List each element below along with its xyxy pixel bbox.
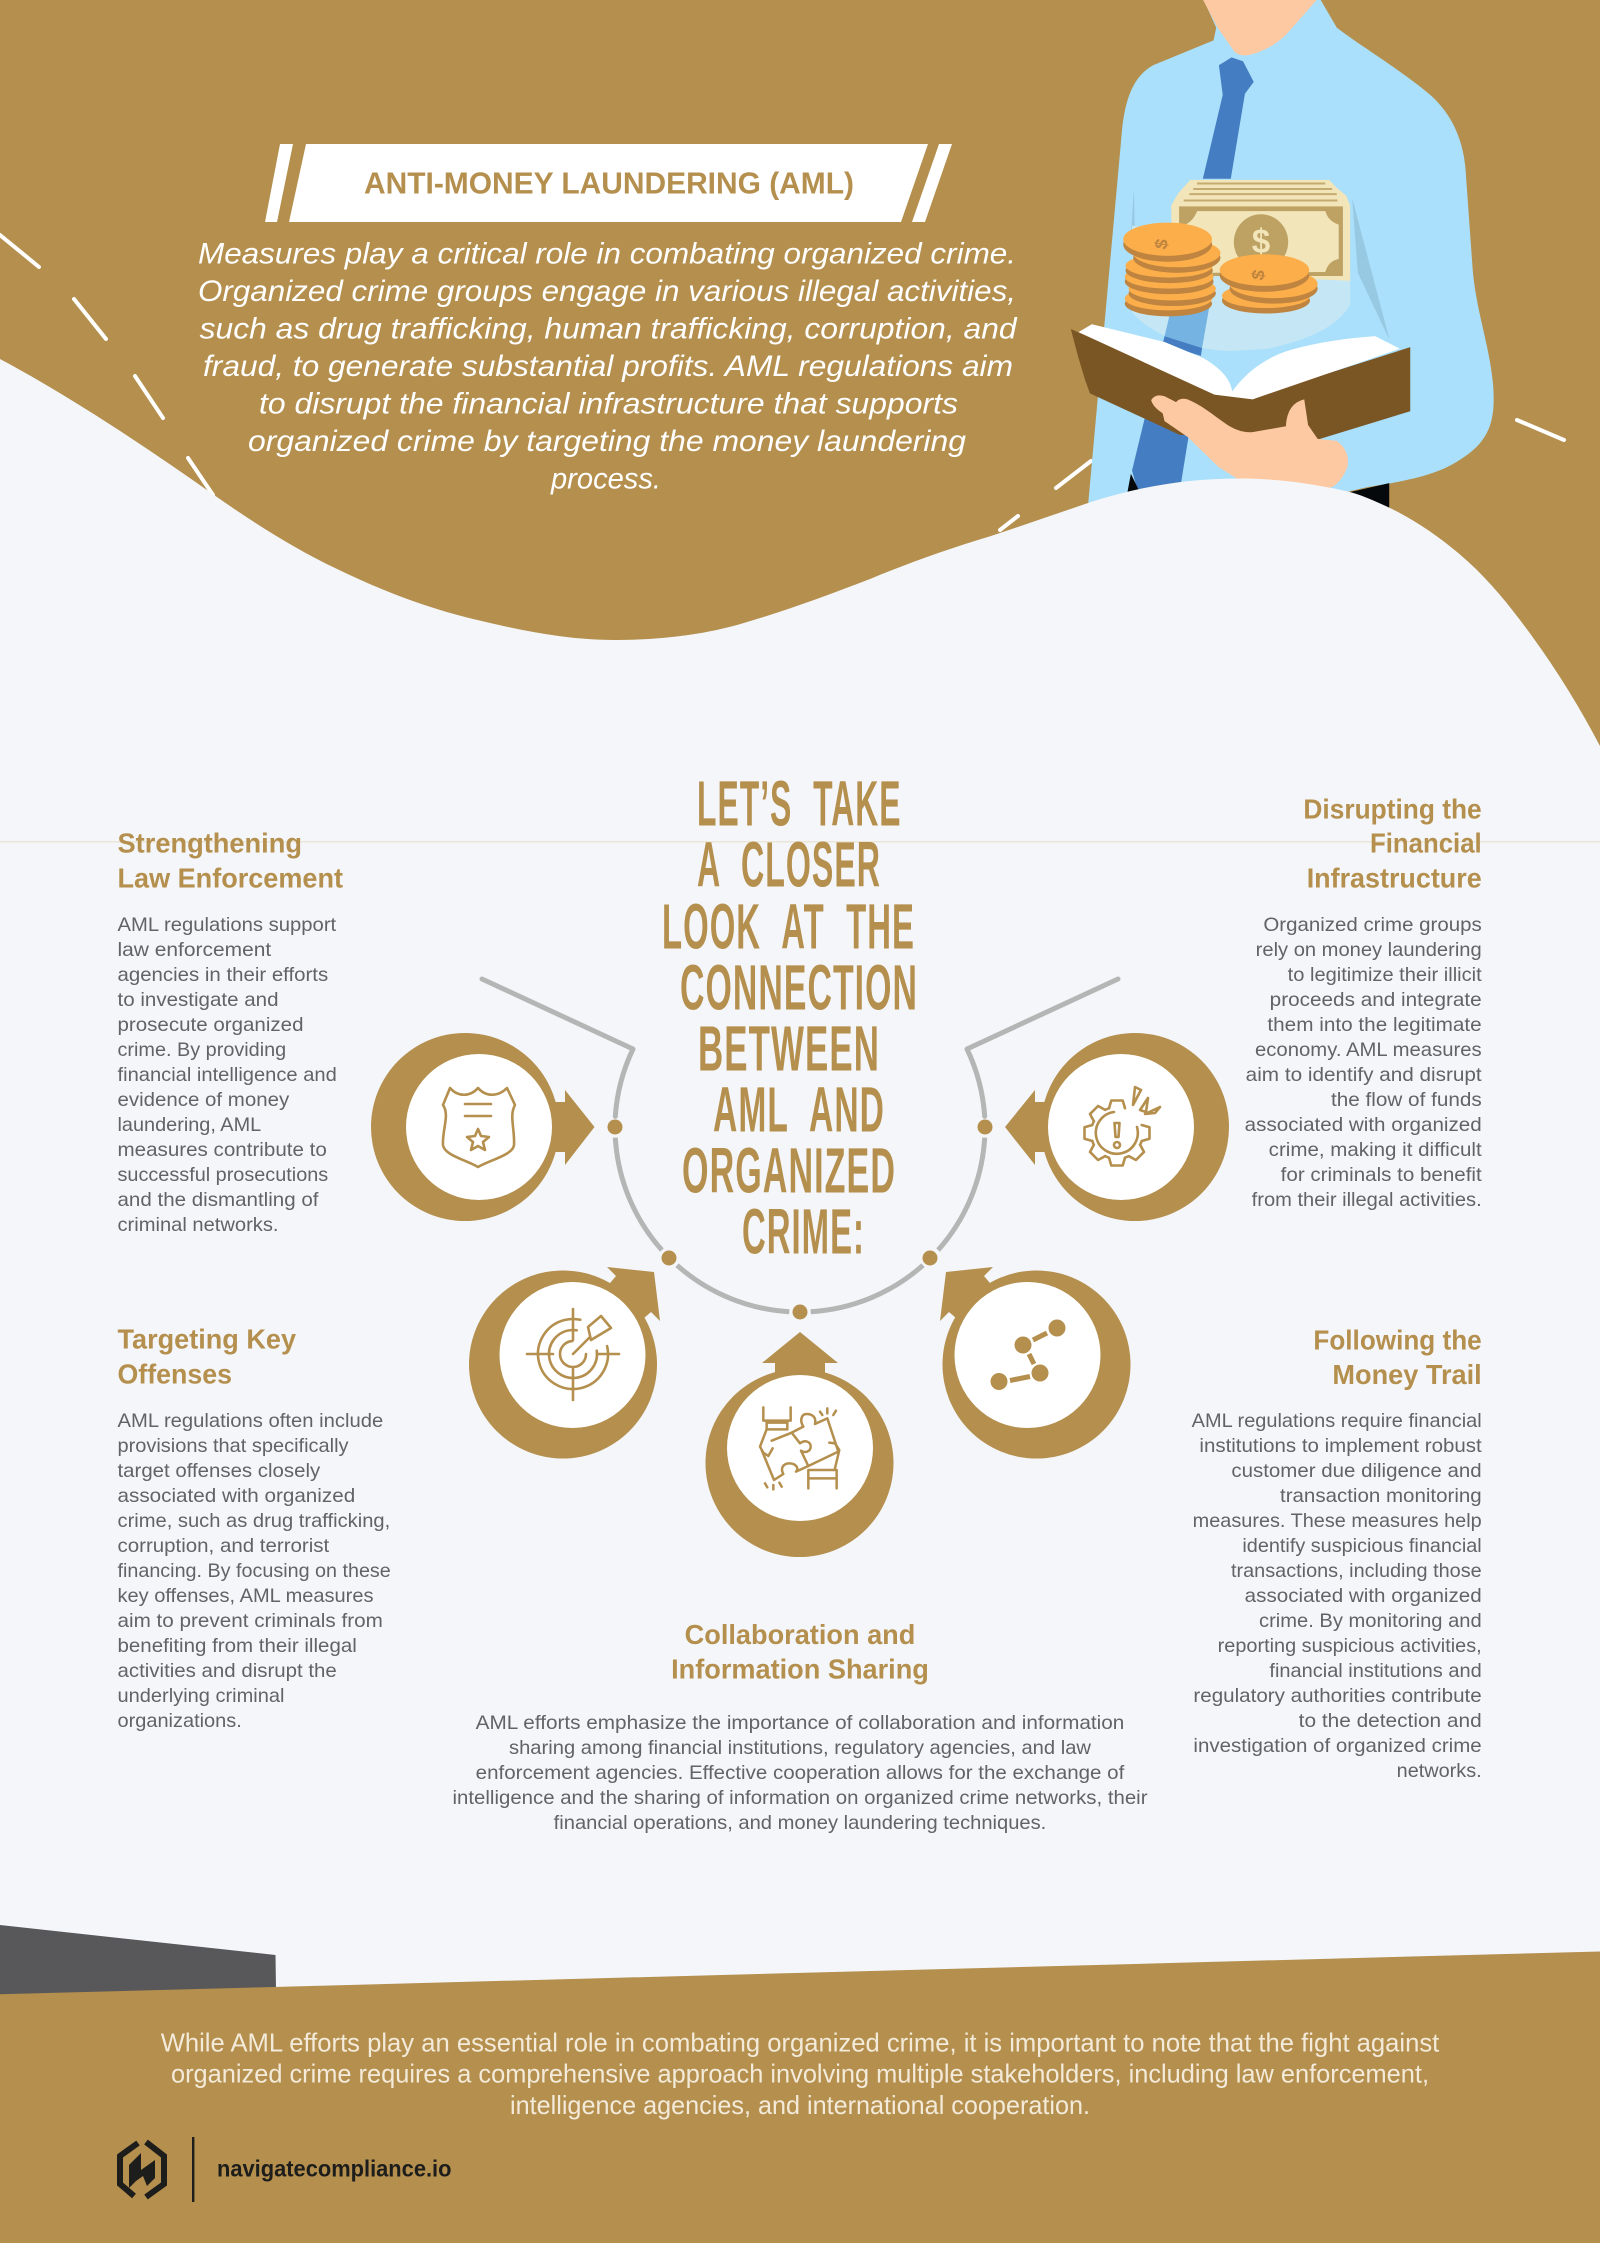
section: Following the Money Trail: to the detection and	[1299, 1710, 1482, 1732]
section: Following the Money Trail: Money Trail	[1332, 1359, 1482, 1390]
logo: navigatecompliance.io	[120, 2137, 452, 2202]
section: Targeting Key Offenses: AML regulations often include	[118, 1410, 383, 1432]
center headline: AML AND	[713, 1074, 885, 1146]
center headline: LET’S TAKE	[697, 768, 902, 840]
intro paragraph: process.	[550, 463, 661, 496]
section: Following the Money Trail: customer due diligence and	[1231, 1460, 1482, 1482]
section: Disrupting the Financial Infrastructure: Disrupting the	[1303, 793, 1482, 824]
section: Following the Money Trail: associated with organized	[1245, 1585, 1482, 1607]
section: Disrupting the Financial Infrastructure	[1245, 793, 1482, 1211]
section: Following the Money Trail: Following the	[1313, 1324, 1482, 1355]
section: Disrupting the Financial Infrastructure: from their illegal activities.	[1252, 1189, 1482, 1211]
white wave divider	[0, 359, 1600, 850]
footer text: intelligence agencies, and international cooperation.	[510, 2090, 1090, 2120]
intro paragraph: to disrupt the financial infrastructure that supports	[259, 388, 958, 420]
section: Following the Money Trail: transaction monitoring	[1280, 1485, 1482, 1507]
section: Disrupting the Financial Infrastructure: proceeds and integrate	[1270, 989, 1482, 1011]
section: Targeting Key Offenses: key offenses, AML measures	[118, 1585, 374, 1607]
section: Targeting Key Offenses: crime, such as drug trafficking,	[118, 1510, 390, 1532]
section: Following the Money Trail: regulatory authorities contribute	[1193, 1685, 1482, 1707]
icon circle: broken gear	[1005, 1033, 1229, 1221]
center headline	[662, 768, 918, 1268]
intro paragraph: fraud, to generate substantial profits. AML regulations aim	[203, 350, 1013, 383]
illustration: man holding a book with money: $	[1252, 224, 1271, 261]
icon circle: network dots	[940, 1267, 1130, 1458]
illustration: man holding a book with money: $	[1248, 268, 1269, 282]
section: Strengthening Law Enforcement: evidence of money	[118, 1089, 289, 1111]
section: Following the Money Trail: crime. By monitoring and	[1259, 1610, 1482, 1632]
section: Disrupting the Financial Infrastructure: aim to identify and disrupt	[1246, 1064, 1482, 1086]
section: Strengthening Law Enforcement: Strengthening	[118, 828, 302, 859]
section: Strengthening Law Enforcement: AML regulations support	[118, 914, 337, 936]
section: Strengthening Law Enforcement: successful prosecutions	[118, 1164, 328, 1186]
icon circle: target	[469, 1267, 660, 1458]
section: Targeting Key Offenses: aim to prevent criminals from	[118, 1610, 383, 1632]
title banner: ANTI-MONEY LAUNDERING (AML)	[364, 166, 854, 200]
icon circle: puzzle collaboration	[706, 1332, 894, 1557]
section: Collaboration and Information Sharing: financial operations, and money laundering techniques.	[554, 1812, 1046, 1834]
section: Targeting Key Offenses: Targeting Key	[118, 1323, 296, 1354]
section: Strengthening Law Enforcement: financial intelligence and	[118, 1064, 337, 1086]
section: Strengthening Law Enforcement: measures contribute to	[118, 1139, 327, 1161]
section: Targeting Key Offenses: organizations.	[118, 1710, 242, 1732]
intro paragraph	[198, 238, 1018, 496]
dark corner accent	[0, 1925, 276, 1998]
section: Following the Money Trail: transactions, including those	[1231, 1560, 1482, 1582]
section: Targeting Key Offenses: financing. By focusing on these	[118, 1560, 391, 1582]
section: Strengthening Law Enforcement: crime. By providing	[118, 1039, 286, 1061]
section: Disrupting the Financial Infrastructure: Organized crime groups	[1263, 914, 1482, 936]
logo: navigatecompliance.io: navigatecompliance.io	[217, 2156, 452, 2182]
intro paragraph: Measures play a critical role in combating organized crime.	[198, 238, 1016, 271]
section: Disrupting the Financial Infrastructure: to legitimize their illicit	[1288, 964, 1482, 986]
footer text: While AML efforts play an essential role in combating organized crime, it is important to note that the fight against	[161, 2028, 1440, 2058]
section: Disrupting the Financial Infrastructure: crime, making it difficult	[1269, 1139, 1482, 1161]
section: Disrupting the Financial Infrastructure: economy. AML measures	[1255, 1039, 1482, 1061]
section: Targeting Key Offenses: corruption, and terrorist	[118, 1535, 330, 1557]
section: Targeting Key Offenses: activities and disrupt the	[118, 1660, 337, 1682]
section: Collaboration and Information Sharing: sharing among financial institutions, regulatory agencies, and law	[509, 1737, 1092, 1759]
section: Collaboration and Information Sharing: enforcement agencies. Effective cooperation allows for the exchange of	[476, 1762, 1125, 1784]
section: Targeting Key Offenses: benefiting from their illegal	[118, 1635, 357, 1657]
footer band	[0, 1952, 1600, 2243]
section: Collaboration and Information Sharing: intelligence and the sharing of information on organized crime networks, their	[452, 1787, 1148, 1809]
section: Disrupting the Financial Infrastructure: them into the legitimate	[1267, 1014, 1482, 1036]
section: Strengthening Law Enforcement: agencies in their efforts	[118, 964, 328, 986]
connector arc with dots	[482, 979, 1118, 1320]
section: Following the Money Trail	[1192, 1324, 1482, 1782]
section: Disrupting the Financial Infrastructure: for criminals to benefit	[1281, 1164, 1482, 1186]
section: Following the Money Trail: networks.	[1397, 1760, 1482, 1782]
section: Following the Money Trail: financial institutions and	[1269, 1660, 1482, 1682]
section: Targeting Key Offenses: associated with organized	[118, 1485, 355, 1507]
section: Targeting Key Offenses: provisions that specifically	[118, 1435, 349, 1457]
footer text: organized crime requires a comprehensive approach involving multiple stakeholders, including law enforcement,	[171, 2059, 1429, 2089]
section: Targeting Key Offenses	[118, 1323, 391, 1732]
title banner	[265, 144, 952, 222]
dashed white flight path	[0, 235, 1564, 530]
section: Strengthening Law Enforcement: Law Enforcement	[118, 862, 343, 893]
section: Strengthening Law Enforcement: laundering, AML	[118, 1114, 261, 1136]
section: Following the Money Trail: measures. These measures help	[1193, 1510, 1482, 1532]
section: Following the Money Trail: AML regulations require financial	[1192, 1410, 1482, 1432]
section: Collaboration and Information Sharing: Collaboration and	[685, 1619, 915, 1650]
intro paragraph: organized crime by targeting the money laundering	[248, 425, 966, 458]
illustration: man holding a book with money: $	[1151, 237, 1172, 251]
section: Disrupting the Financial Infrastructure: rely on money laundering	[1256, 939, 1482, 961]
section: Strengthening Law Enforcement: to investigate and	[118, 989, 278, 1011]
section: Strengthening Law Enforcement: law enforcement	[118, 939, 272, 961]
section: Targeting Key Offenses: target offenses closely	[118, 1460, 320, 1482]
intro paragraph: such as drug trafficking, human trafficking, corruption, and	[200, 312, 1018, 345]
section: Following the Money Trail: institutions to implement robust	[1199, 1435, 1482, 1457]
section: Collaboration and Information Sharing: Information Sharing	[671, 1653, 929, 1684]
center headline: CONNECTION	[680, 951, 918, 1023]
section: Disrupting the Financial Infrastructure: Infrastructure	[1307, 862, 1482, 893]
section: Collaboration and Information Sharing	[452, 1619, 1148, 1834]
section: Strengthening Law Enforcement: prosecute organized	[118, 1014, 304, 1036]
illustration: man holding a book with money	[1071, 0, 1494, 514]
section: Strengthening Law Enforcement	[118, 828, 343, 1236]
section: Collaboration and Information Sharing: AML efforts emphasize the importance of collaboration and information	[476, 1712, 1124, 1734]
center headline: ORGANIZED	[682, 1134, 896, 1206]
center headline: CRIME:	[742, 1196, 865, 1268]
section: Following the Money Trail: investigation of organized crime	[1193, 1735, 1482, 1757]
icon circle: shield	[371, 1033, 594, 1221]
footer text	[161, 2028, 1440, 2120]
intro paragraph: Organized crime groups engage in various illegal activities,	[198, 275, 1016, 308]
faint horizontal line	[0, 841, 1600, 842]
section: Following the Money Trail: identify suspicious financial	[1242, 1535, 1482, 1557]
section: Disrupting the Financial Infrastructure: Financial	[1370, 828, 1482, 859]
section: Disrupting the Financial Infrastructure: associated with organized	[1245, 1114, 1482, 1136]
center headline: A CLOSER	[697, 829, 881, 901]
section: Disrupting the Financial Infrastructure: the flow of funds	[1331, 1089, 1482, 1111]
gold header background	[0, 0, 1600, 800]
section: Strengthening Law Enforcement: and the dismantling of	[118, 1189, 319, 1211]
section: Strengthening Law Enforcement: criminal networks.	[118, 1214, 278, 1236]
section: Following the Money Trail: reporting suspicious activities,	[1218, 1635, 1482, 1657]
section: Targeting Key Offenses: underlying criminal	[118, 1685, 284, 1707]
section: Targeting Key Offenses: Offenses	[118, 1358, 232, 1389]
center headline: BETWEEN	[698, 1012, 880, 1084]
center headline: LOOK AT THE	[662, 890, 915, 962]
